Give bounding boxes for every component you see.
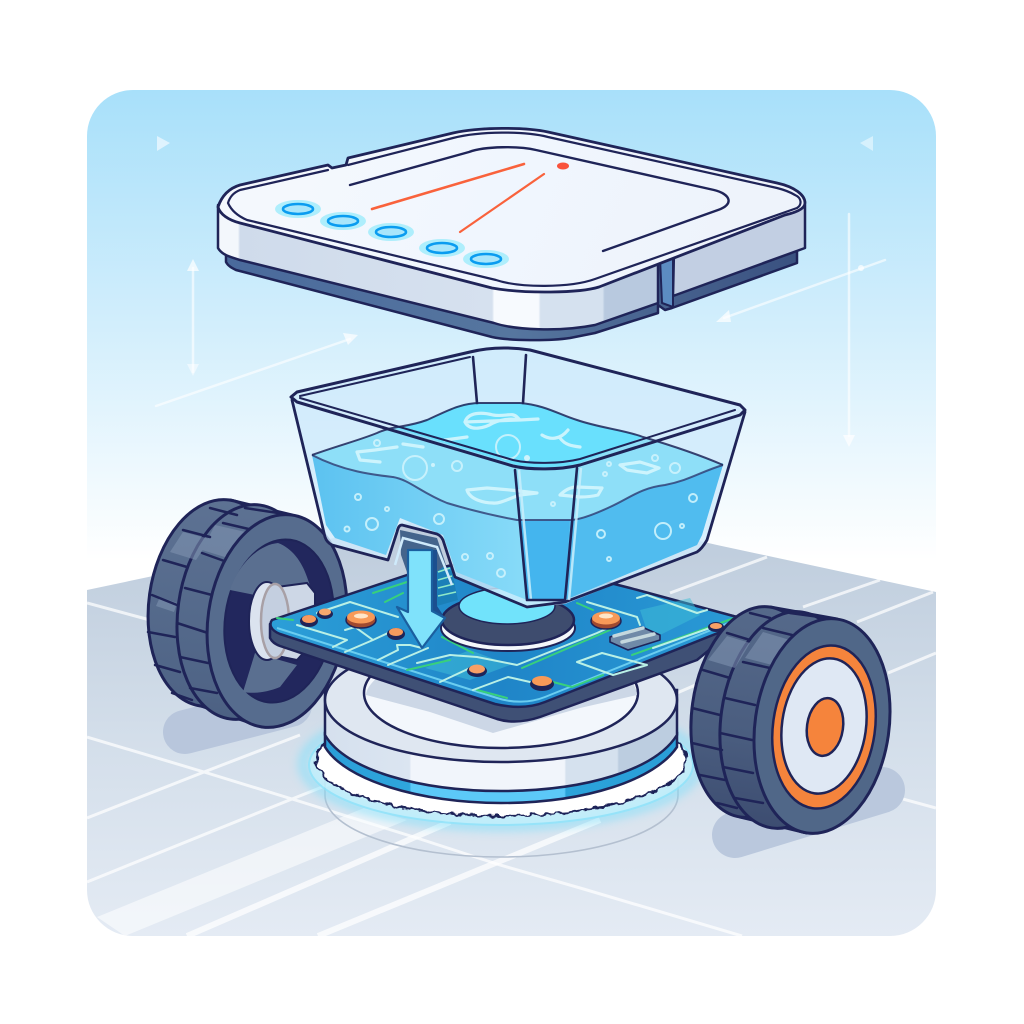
tire hull: [201, 500, 292, 727]
circuit board: [270, 555, 738, 721]
orange center: [803, 696, 847, 758]
light hub: [773, 653, 875, 799]
central cup white ring: [441, 605, 575, 651]
decorative triangle right: [860, 136, 873, 151]
ground ring: [325, 775, 678, 857]
central cup inner: [459, 588, 555, 624]
orange pad small mid: [387, 628, 405, 640]
board top surface: [271, 555, 738, 707]
lid screen outline: [350, 147, 729, 251]
ladder behind notch: [437, 560, 458, 606]
lid side right: [673, 205, 805, 296]
left wheel: [135, 491, 360, 737]
lid side left: [218, 205, 658, 329]
orange ring: [762, 639, 886, 815]
mop pad fringe: [316, 704, 686, 816]
tire front face: [741, 610, 903, 842]
disk inner plate: [364, 638, 638, 748]
wide light band: [97, 808, 407, 936]
blue indicator 5: [463, 250, 509, 268]
decorative arrow: right vertical: [843, 214, 855, 447]
hub ring: [261, 584, 289, 658]
light traces: [297, 595, 710, 690]
orange pad lower: [467, 664, 487, 677]
wheel well grey wedge: [243, 653, 297, 693]
shadow on disk: [366, 640, 637, 733]
mop glow ring: [309, 705, 693, 825]
water center face: [520, 520, 570, 600]
lid slot: [660, 258, 673, 307]
floor grid lines: [87, 557, 936, 936]
shadow: left wheel: [185, 705, 290, 732]
water tank: [291, 348, 745, 648]
orange pad small right: [708, 622, 724, 632]
disk top face: [325, 638, 677, 762]
lid: [218, 128, 805, 340]
water back line: [312, 403, 723, 465]
decorative arrow: left diagonal: [156, 333, 358, 406]
blue indicator 1: [275, 200, 321, 218]
wheel well grey top: [230, 543, 315, 600]
lid rim inner: [228, 133, 801, 286]
red line left: [372, 164, 524, 209]
bubbles: [344, 435, 697, 577]
panel: background: [87, 90, 936, 936]
decorative triangle left: [157, 136, 170, 151]
tread lines: [692, 613, 827, 808]
arrow dark side: [420, 550, 445, 648]
orange pad large left: [346, 610, 376, 628]
hub collar: [249, 582, 285, 660]
decorative arrow: left vertical: [187, 259, 199, 376]
lid top face: [218, 128, 805, 292]
right wheel: [678, 598, 903, 842]
tread highlights: [156, 525, 250, 612]
blue indicator 4: [419, 239, 465, 257]
red line right: [460, 174, 544, 232]
blue motor under board: [430, 690, 520, 716]
green traces: [277, 582, 737, 698]
tire middle tread: [164, 496, 326, 728]
lid base: [226, 250, 797, 340]
cyan glow patches: [425, 598, 700, 680]
central cup dark ring: [442, 595, 574, 645]
blue band: [325, 733, 677, 803]
chip: [610, 627, 660, 650]
water surface behind rim: [393, 403, 643, 467]
tire back tread: [678, 598, 832, 826]
water right face: [565, 465, 723, 600]
board front bevel: [277, 622, 731, 702]
orange pad large right: [591, 612, 621, 629]
blue indicator 2: [320, 212, 366, 230]
tank outline: [292, 400, 745, 607]
blue indicator 3: [368, 223, 414, 241]
water body: [312, 455, 723, 600]
back wall lines: [473, 355, 526, 403]
arrow body: [397, 550, 445, 648]
tire front face: [194, 505, 360, 737]
flow arrow: [397, 550, 445, 648]
notch recess: [400, 530, 446, 575]
orange pad small left: [300, 615, 318, 627]
water surface: [312, 403, 723, 520]
front panel highlights: [519, 468, 581, 600]
orange pad small upper: [317, 608, 333, 619]
board edge thickness: [270, 560, 737, 721]
tire middle tread: [706, 603, 868, 837]
swirls: [357, 413, 659, 503]
tank glass body: [292, 348, 745, 608]
disk side shell: [325, 690, 677, 791]
ladder lines: [438, 568, 456, 596]
decorative arrow: right diagonal: [716, 260, 885, 322]
red dot: [557, 162, 569, 170]
shadow: right wheel: [735, 790, 882, 835]
mop glow: [303, 702, 699, 826]
spinning disk: [325, 638, 677, 803]
water wave line: [312, 455, 723, 520]
orange pad bottom: [530, 676, 554, 691]
front panel edges: [515, 468, 577, 600]
tank rim: [291, 348, 745, 469]
tank inner rim: [300, 357, 735, 463]
tread lines: [148, 508, 278, 700]
floor: [87, 500, 936, 936]
tire hull: [740, 607, 837, 833]
notch inner line: [395, 538, 452, 585]
hub cylinder: [277, 583, 315, 660]
wheel inner well: [214, 532, 344, 710]
tread highlights: [708, 632, 790, 668]
tire back tread: [135, 491, 295, 715]
